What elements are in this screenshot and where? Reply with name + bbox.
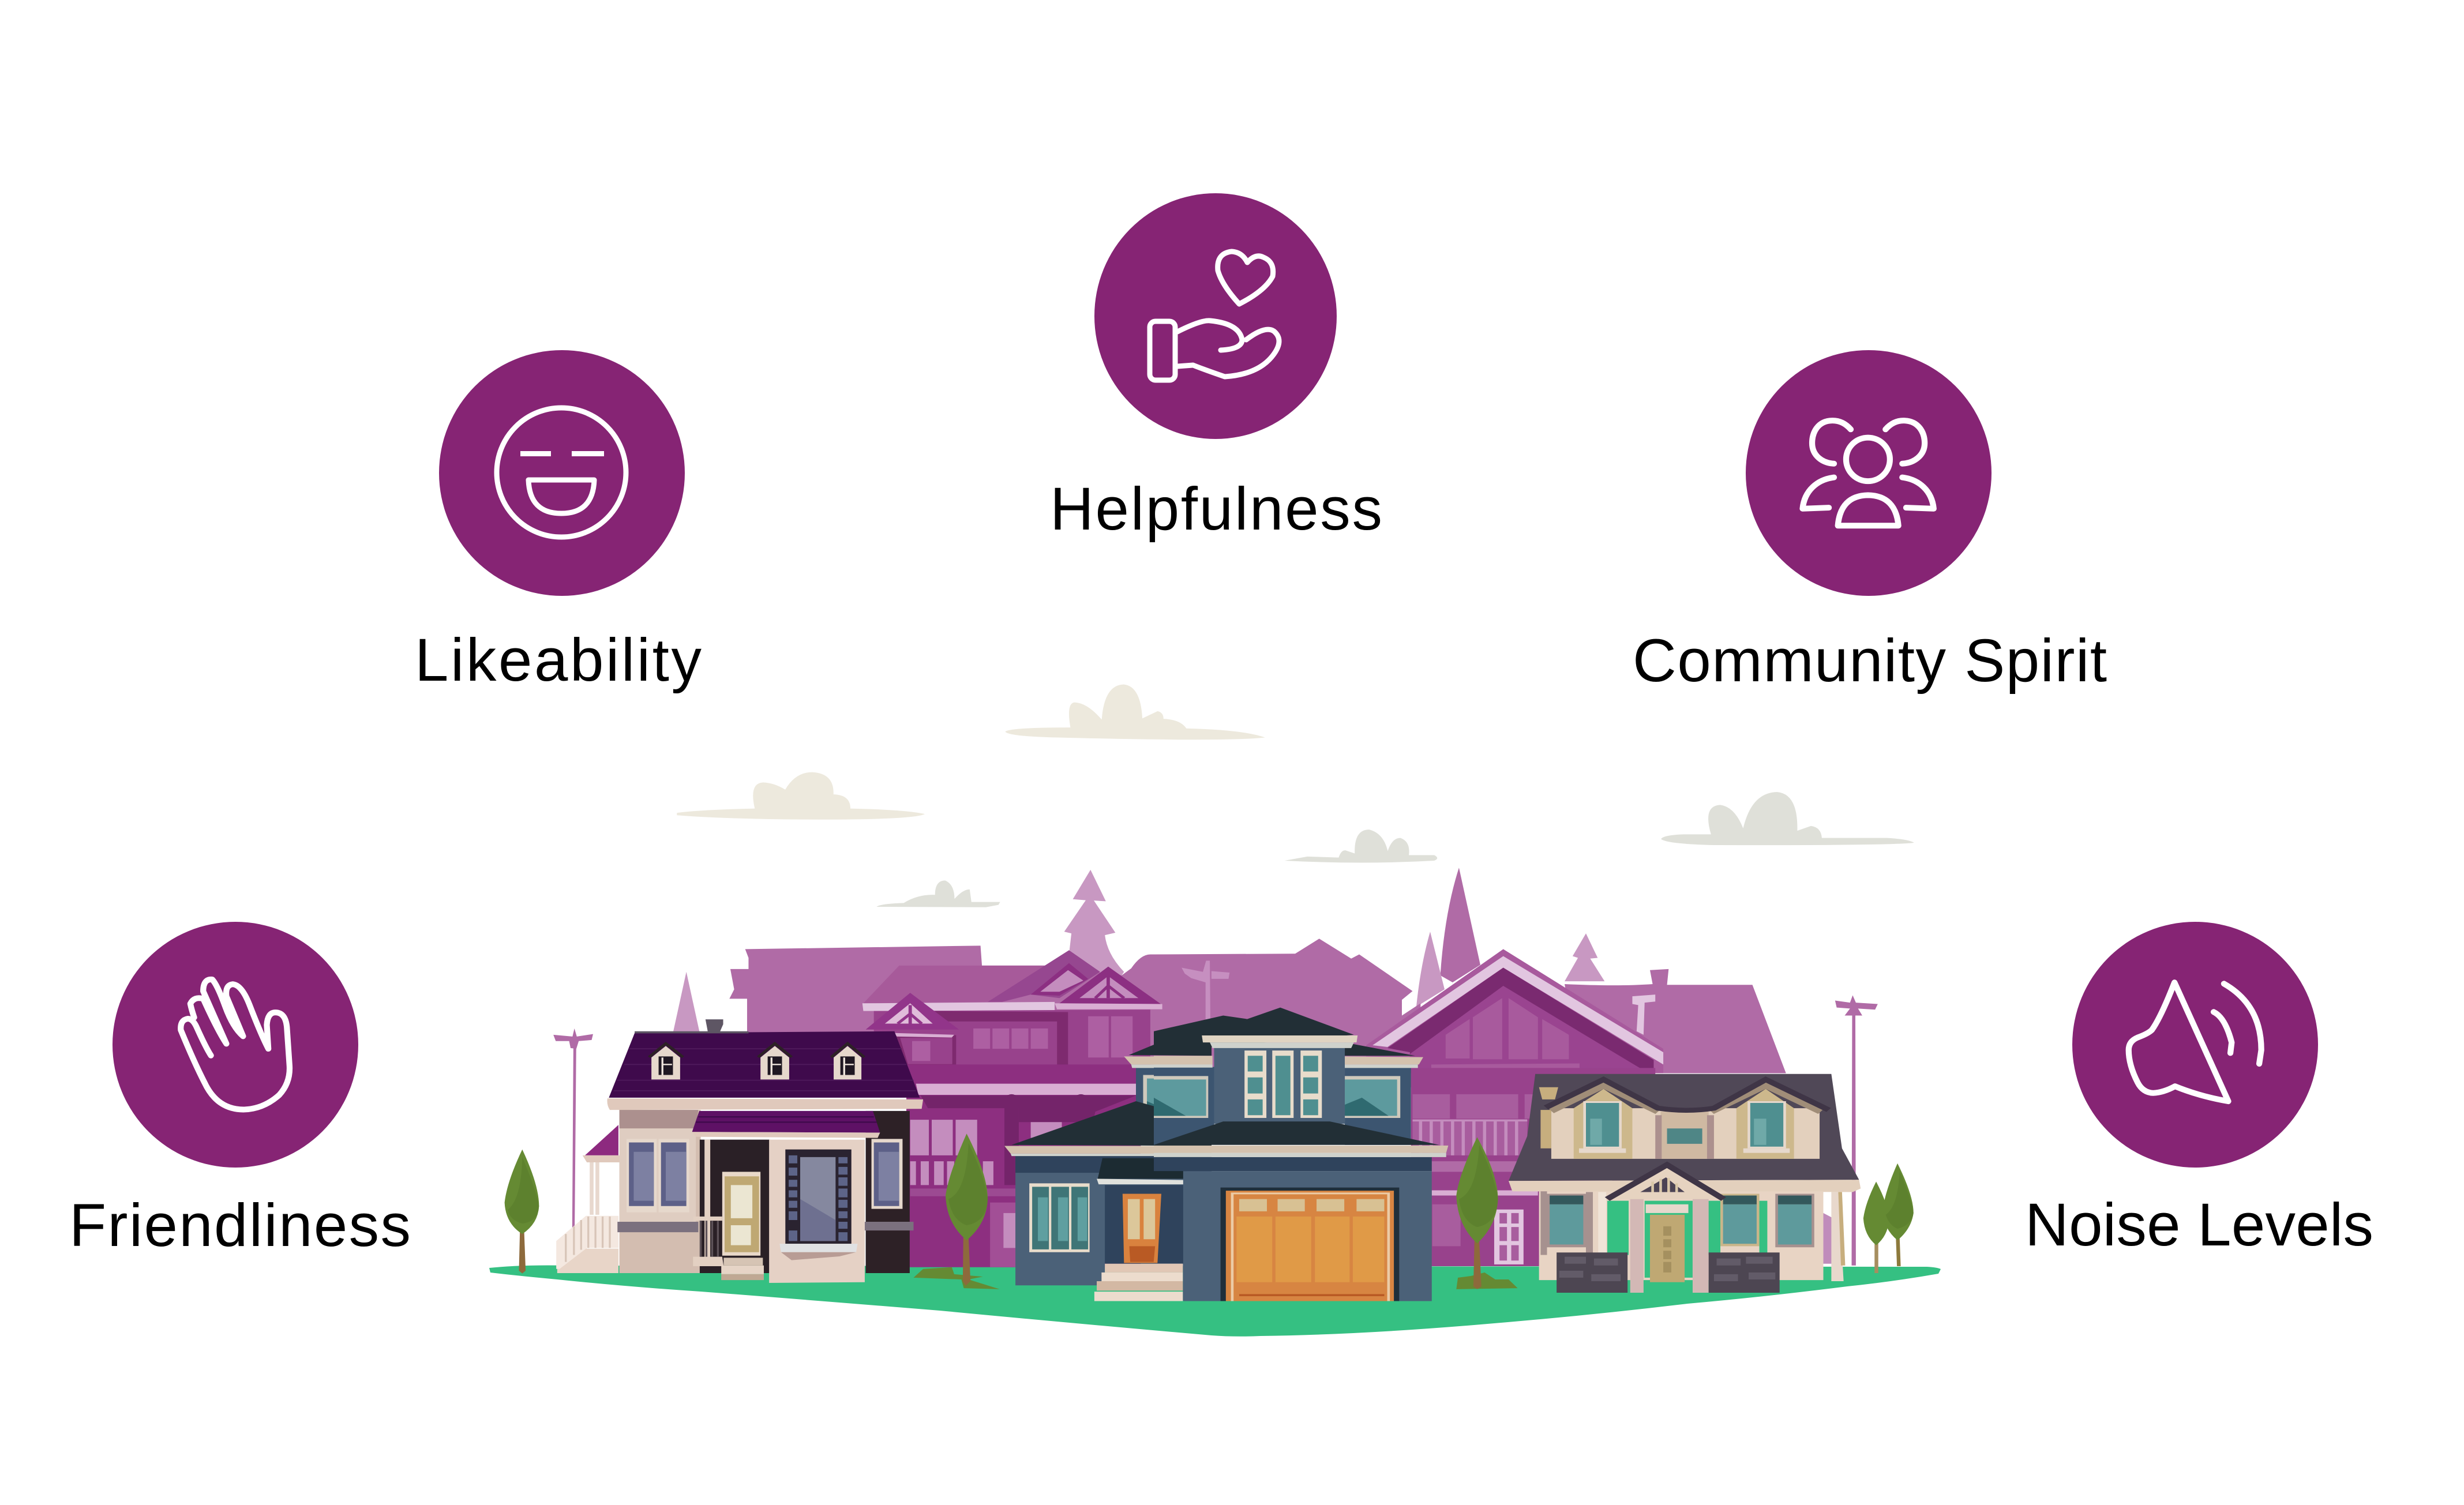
chimney detail <box>1632 994 1655 1035</box>
entry <box>1097 1158 1191 1264</box>
cloud: centre small <box>1285 830 1437 862</box>
utility pole right <box>1835 995 1878 1266</box>
roof chimney <box>1539 1087 1558 1149</box>
church spire <box>1441 868 1480 982</box>
cornice <box>607 1098 923 1110</box>
tree mid right <box>1456 1137 1498 1289</box>
spike silhouette <box>673 972 700 1033</box>
item: Helpfulness <box>1050 193 1382 543</box>
gable wall <box>1410 986 1646 1075</box>
cloud: left <box>677 772 925 820</box>
entry steps <box>1094 1264 1183 1301</box>
label: Helpfulness: Helpfulness <box>1050 475 1382 543</box>
lower wall <box>1539 1191 1823 1280</box>
upper wings <box>1154 1066 1411 1145</box>
left wing window <box>1029 1183 1090 1252</box>
circle: Friendliness <box>112 922 358 1168</box>
cornice <box>1509 1180 1861 1192</box>
bay window <box>769 1140 865 1283</box>
door <box>1650 1215 1685 1282</box>
tree silhouette <box>1064 870 1124 1031</box>
tree silhouette right <box>1565 933 1604 981</box>
circle: Noise Levels <box>2072 922 2318 1168</box>
cloud: right <box>1661 792 1914 845</box>
upper wall <box>1551 1108 1820 1159</box>
gable dark band <box>1387 968 1653 1073</box>
gable stripe <box>1372 956 1663 1064</box>
label: Friendliness: Friendliness <box>69 1192 411 1259</box>
spike silhouette right <box>1416 932 1445 1007</box>
lower roof <box>1154 1121 1439 1145</box>
tree far left <box>505 1150 539 1274</box>
entrance bay <box>693 1140 770 1280</box>
silhouette block left <box>729 945 1212 1087</box>
right dark wall <box>865 1111 913 1273</box>
silhouette block right <box>1565 969 1786 1073</box>
lower wall <box>906 1064 1141 1267</box>
trees <box>505 1134 1914 1289</box>
lower wall <box>1411 1068 1655 1266</box>
item: Friendliness <box>69 922 411 1259</box>
bush patch <box>913 1267 1000 1289</box>
eaves band <box>862 1002 1055 1011</box>
stone planters <box>1557 1252 1780 1293</box>
central tower <box>1214 1047 1345 1124</box>
beige house <box>1509 1074 1861 1293</box>
circle: Community Spirit <box>1746 350 1992 596</box>
item: Likeability <box>415 350 702 694</box>
blue house right part <box>1154 1008 1448 1301</box>
label: Likeability: Likeability <box>415 626 702 694</box>
bush patch right <box>1456 1273 1518 1289</box>
cloud: top centre <box>1005 684 1265 740</box>
upper roof <box>1154 1008 1423 1068</box>
side porch with stairs <box>556 1125 620 1273</box>
blue house <box>1004 1008 1448 1301</box>
icon: group of people <box>1803 421 1934 526</box>
garage door <box>1221 1188 1399 1301</box>
main wall <box>1154 1146 1448 1301</box>
columns and porch gable <box>1607 1165 1724 1293</box>
chimney <box>706 1019 723 1032</box>
purple background house left <box>862 950 1162 1267</box>
upper storey left <box>1124 1021 1212 1143</box>
utility pole left <box>553 1029 593 1257</box>
left wing wall <box>1004 1146 1212 1300</box>
lower windows <box>1547 1194 1814 1247</box>
upper wall <box>874 1009 1150 1066</box>
left wall <box>617 1110 701 1273</box>
label: Community Spirit: Community Spirit <box>1633 627 2107 695</box>
icon: speaker <box>2129 982 2262 1101</box>
icon: smiling face <box>497 408 626 537</box>
background silhouettes <box>553 868 1878 1266</box>
item: Community Spirit <box>1633 350 2107 695</box>
roof <box>1509 1074 1859 1181</box>
label: Noise Levels: Noise Levels <box>2025 1191 2373 1259</box>
lower roof left <box>1011 1101 1212 1146</box>
front gable right <box>1055 967 1162 1009</box>
left windows <box>627 1139 902 1213</box>
silhouette pole <box>1182 960 1212 1021</box>
tree mid left <box>946 1134 988 1286</box>
rear gable <box>988 950 1100 1002</box>
dormers <box>649 1044 864 1079</box>
silhouette pole centre <box>1182 960 1229 1021</box>
porch roof <box>692 1111 880 1138</box>
blue house left part <box>1004 1021 1212 1301</box>
cloud: left small <box>877 880 1000 907</box>
silhouette block centre <box>1154 939 1420 1087</box>
white house with purple roof <box>556 1019 923 1283</box>
item: Noise Levels <box>2025 922 2373 1259</box>
side porch right <box>1823 1192 1845 1281</box>
dormers <box>1546 1079 1829 1159</box>
circle: Likeability <box>439 350 685 596</box>
icon: waving hand <box>181 979 290 1109</box>
main roof <box>609 1031 920 1098</box>
purple background house right <box>1366 949 1663 1266</box>
tree far right pair <box>1863 1164 1914 1273</box>
front gable left <box>866 993 959 1030</box>
ground <box>489 1266 1941 1337</box>
icon: hand holding heart <box>1150 252 1279 380</box>
circle: Helpfulness <box>1094 193 1337 439</box>
clouds <box>677 684 1914 907</box>
